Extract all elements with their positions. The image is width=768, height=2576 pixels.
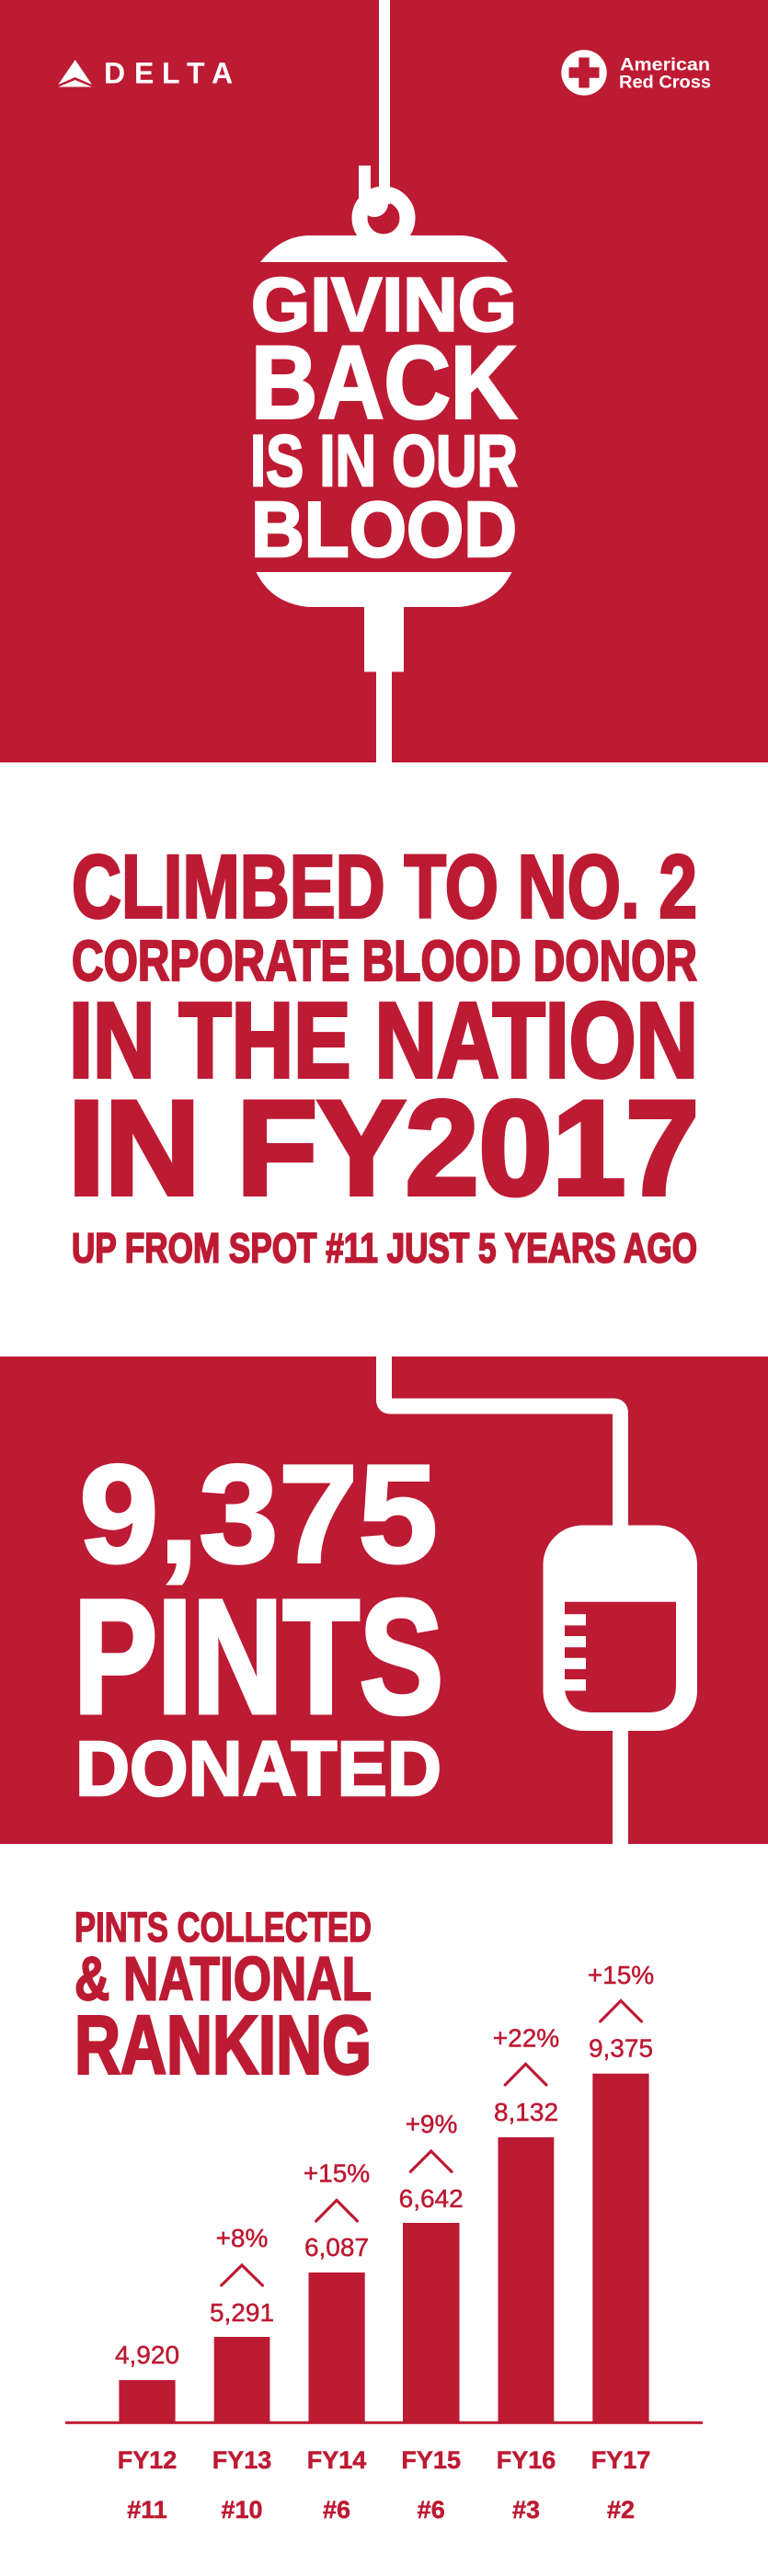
national rank labels: #11 [127,2496,167,2524]
national rank labels: #6 [418,2496,445,2524]
title: BACK [251,326,517,440]
growth percentages: +9% [406,2110,457,2138]
title: IS IN OUR [250,419,518,501]
logo: American Red Cross: American [620,56,710,75]
icon: blood bag with tubes [256,0,511,762]
fiscal year labels: FY15 [401,2446,461,2474]
icon: tube to bag [384,1357,620,1844]
heading: pints collected and national ranking: & NATIONAL [75,1944,372,2014]
growth percentages: +8% [216,2224,268,2252]
stat: 9,375 pints donated: PINTS [74,1567,443,1747]
heading: pints collected and national ranking [75,1904,372,2091]
value labels: 8,132 [494,2098,558,2126]
stat: 9,375 pints donated: 9,375 [79,1437,438,1593]
logo: American Red Cross: Red Cross [619,74,711,92]
national rank labels: #2 [607,2496,635,2524]
title [250,261,518,574]
panel: hero [0,0,768,762]
national rank labels: #6 [323,2496,350,2524]
title: GIVING [251,261,517,348]
fiscal year labels: FY14 [307,2446,366,2474]
heading: pints collected and national ranking: PINTS COLLECTED [75,1904,372,1951]
fiscal year labels: FY12 [118,2446,177,2474]
growth percentages: +22% [493,2024,559,2053]
value labels: 6,087 [304,2233,369,2261]
stat: 9,375 pints donated: DONATED [75,1725,441,1812]
growth percentages [216,1961,654,2252]
text block: climbed to no. 2: IN FY2017 [68,1072,699,1223]
fiscal year labels: FY13 [212,2446,271,2474]
value labels: 5,291 [210,2298,274,2327]
national rank labels: #10 [221,2496,263,2524]
bars [119,2074,649,2422]
heading: pints collected and national ranking: RANKING [75,1999,372,2091]
title: BLOOD [251,487,517,574]
growth percentages: +15% [304,2159,370,2188]
value labels: 4,920 [115,2341,179,2369]
fiscal year labels: FY16 [497,2446,556,2474]
logo: American Red Cross [561,50,711,96]
fiscal year labels: FY17 [591,2446,650,2474]
fiscal year labels [118,2446,650,2474]
growth percentages: +15% [588,1961,654,1989]
growth arrows [222,2001,641,2285]
national rank labels: #3 [512,2496,540,2524]
stat: 9,375 pints donated [74,1437,443,1812]
value labels [115,2034,653,2369]
panel: pints donated [0,1357,768,1844]
icon: blood bag [543,1525,697,1731]
value labels: 6,642 [399,2184,464,2213]
bar chart [65,1961,703,2524]
value labels: 9,375 [589,2034,653,2062]
national rank labels [127,2496,635,2524]
text block: climbed to no. 2 [68,837,699,1271]
logo: Delta: DELTA [104,57,233,90]
